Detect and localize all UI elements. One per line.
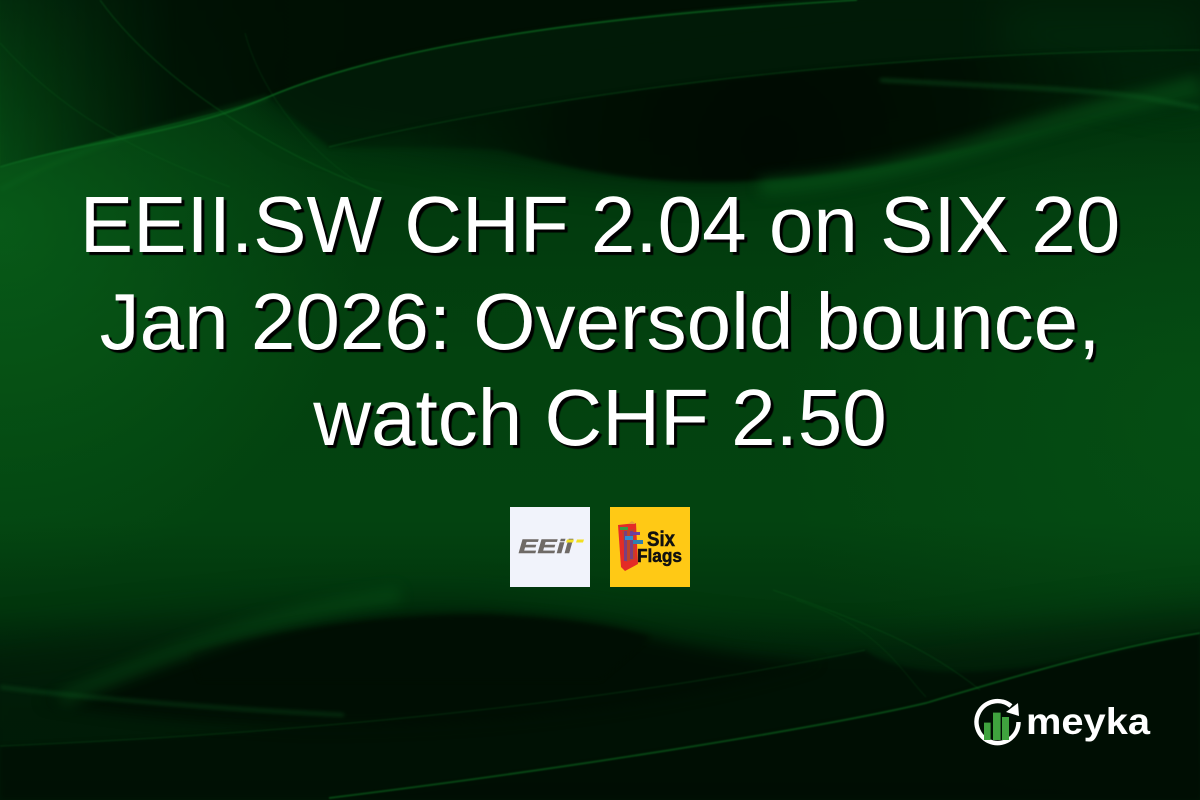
logo: EEII: EEii — [518, 536, 573, 558]
title: watch CHF 2.50 — [313, 373, 887, 462]
bottom: deep corner — [329, 633, 1200, 800]
top dark field above curve A — [0, 0, 860, 167]
curve highlights, top — [0, 0, 857, 167]
logo: EEII — [510, 507, 590, 587]
curve highlights, bottom — [329, 633, 1200, 798]
icon: circular arrow with bars — [977, 701, 1019, 743]
logo: Six Flags: Flags — [637, 546, 682, 566]
logo: Six Flags: Six — [647, 528, 675, 551]
wordmark: meyka — [1026, 701, 1150, 742]
dark lens — [329, 50, 1200, 182]
title — [80, 180, 1120, 462]
title: EEII.SW CHF 2.04 on SIX 20 — [80, 180, 1120, 269]
band between curve A and B — [268, 0, 1200, 147]
band below curve A: soft dark field — [230, 0, 1200, 175]
bottom: soft dark field — [0, 608, 1200, 800]
bottom: lower band — [0, 633, 1200, 800]
logo: meyka — [974, 698, 1150, 746]
bottom: dark hump — [40, 615, 820, 728]
title: Jan 2026: Oversold bounce, — [100, 276, 1100, 366]
logo: Six Flags — [610, 507, 690, 587]
